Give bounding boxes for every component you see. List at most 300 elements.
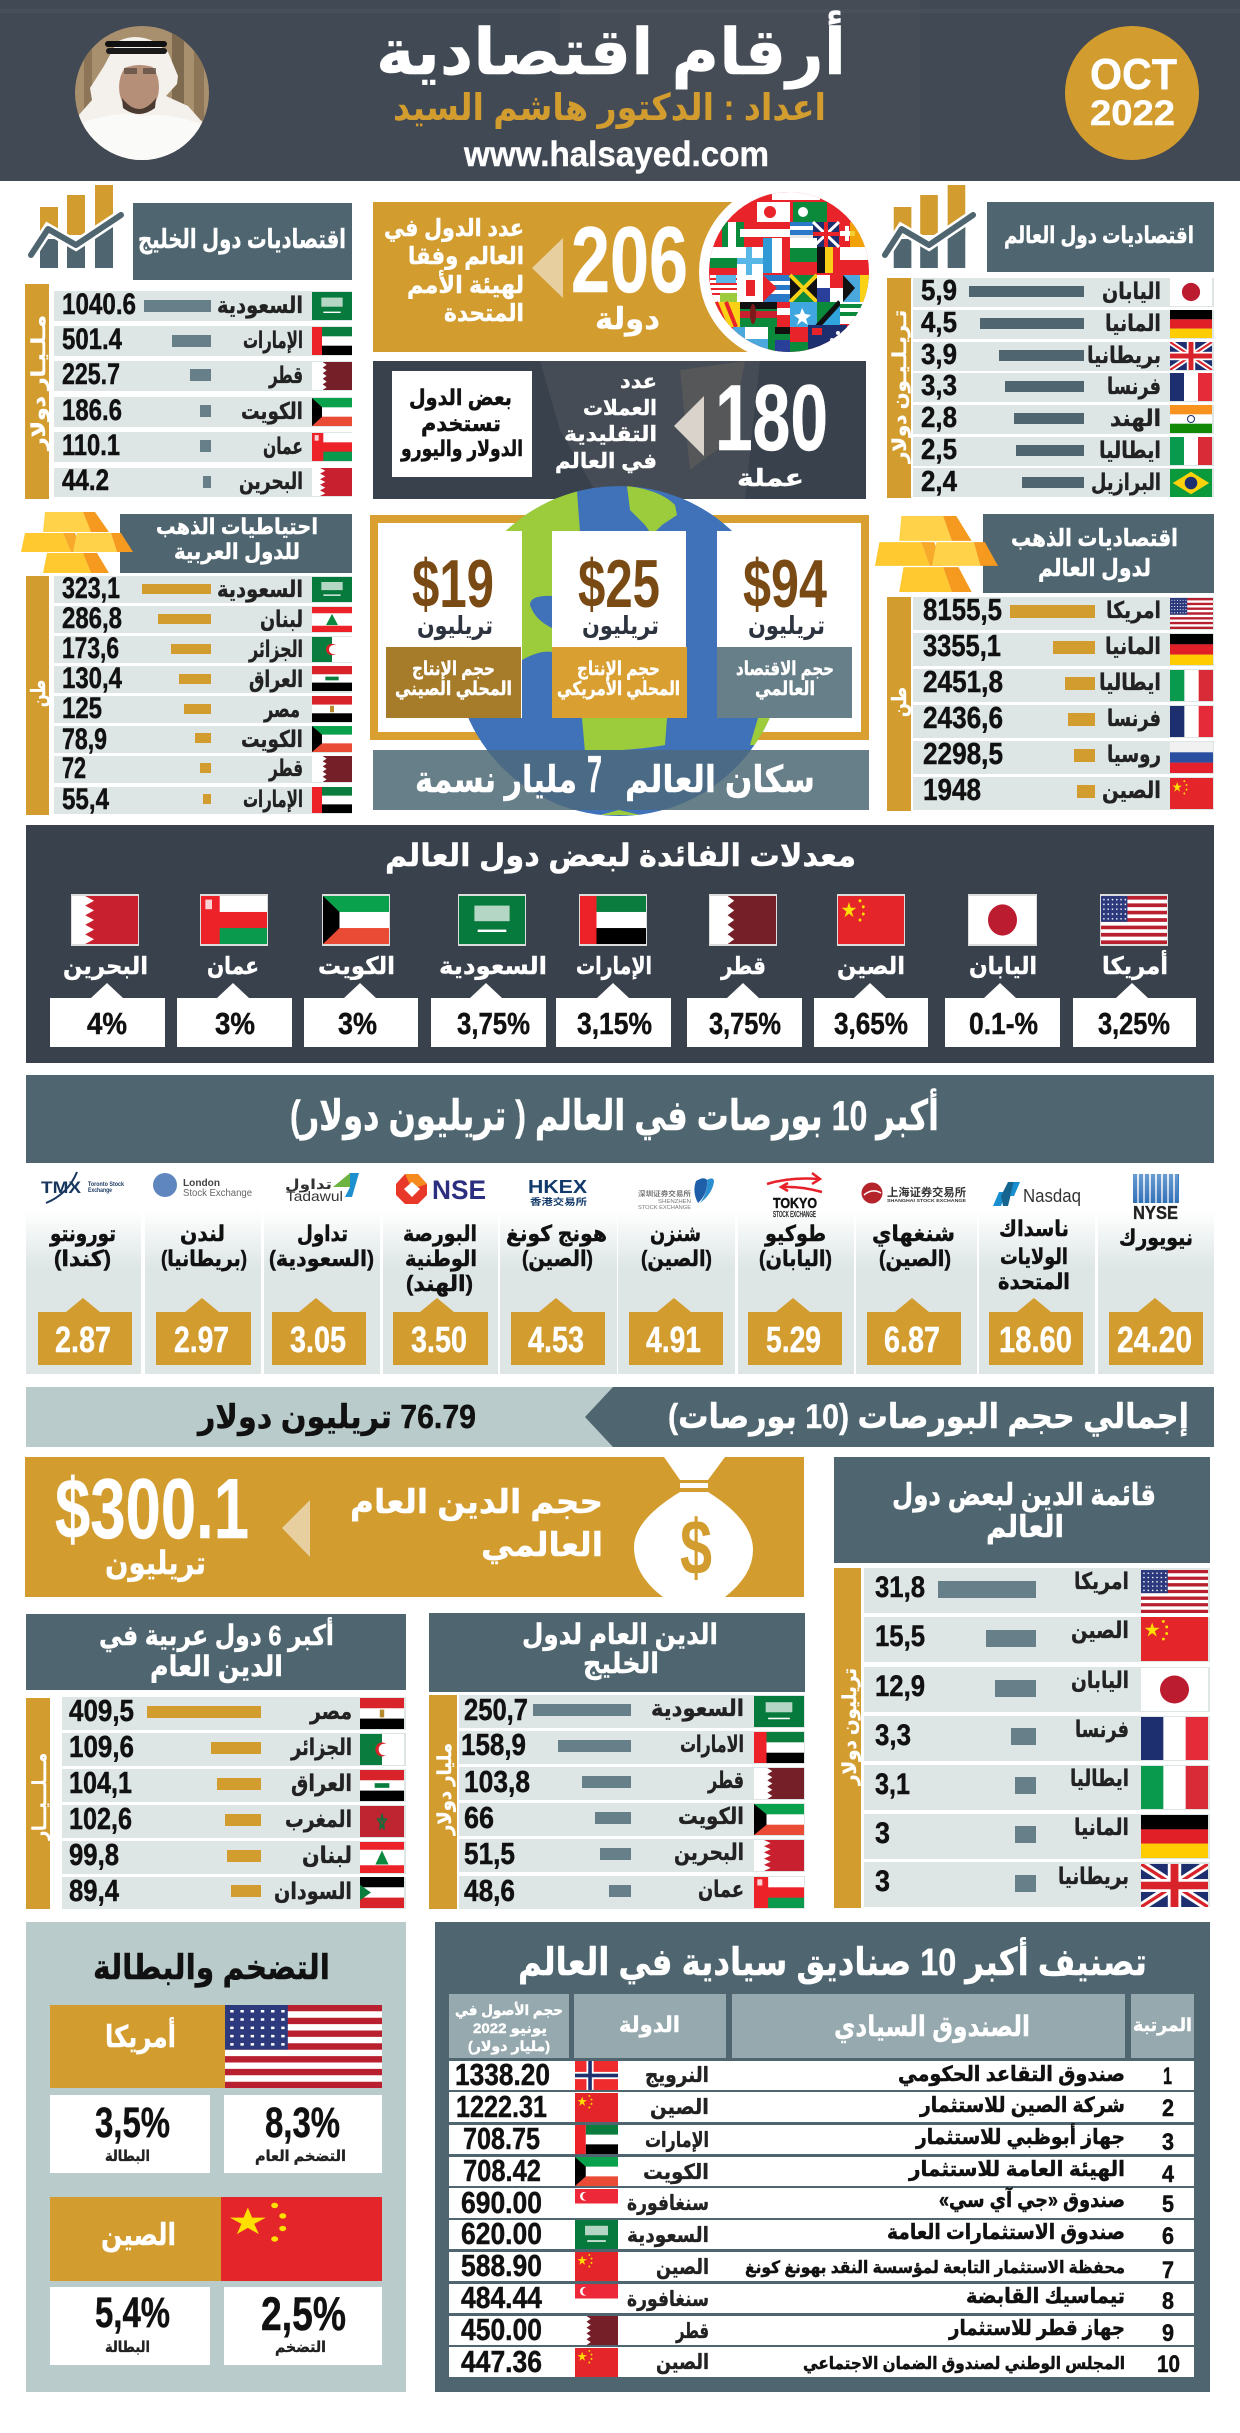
- table row 2: 2: [1162, 2095, 1174, 2122]
- table header: المرتبة: [1133, 2015, 1192, 2036]
- heading: [834, 1457, 1210, 1563]
- logo: HKEX: 香港交易所: [530, 1196, 587, 1207]
- heading: التضخم والبطالة: [93, 1949, 330, 1988]
- table row 1: صندوق التقاعد الحكومي: [898, 2063, 1125, 2086]
- table row 2: شركة الصين للاستثمار: [919, 2094, 1125, 2117]
- row: Saudi: [54, 288, 352, 321]
- table row 5: 5: [1162, 2191, 1174, 2218]
- band: world population: 7: [587, 746, 602, 804]
- row: Oman: 48,6: [464, 1873, 515, 1908]
- row: China: الصين: [1102, 777, 1161, 804]
- table row 2: الصين: [650, 2096, 709, 2119]
- column: Toronto: [26, 1165, 141, 1374]
- column: Shenzhen: [618, 1165, 735, 1374]
- logo: Shenzhen: [638, 1178, 714, 1211]
- table header: الصندوق السيادي: [834, 2011, 1030, 2043]
- item: Oman: 3%: [215, 1006, 255, 1041]
- unit bar: [25, 284, 50, 499]
- column: London: [145, 1165, 261, 1374]
- row: Germany: المانيا: [1074, 1814, 1129, 1840]
- row: Japan: 5,9: [921, 275, 957, 307]
- panel: Arab public debt: [26, 1614, 406, 1909]
- table row 7: الصين: [656, 2256, 709, 2279]
- row: India: الهند: [1110, 405, 1161, 432]
- table row 6: 6: [1162, 2223, 1174, 2250]
- item: Qatar: 3,75%: [709, 1006, 781, 1041]
- card: US GDP: [552, 546, 687, 718]
- panel: total exchanges: [26, 1387, 1214, 1447]
- logo: Nasdaq: [993, 1182, 1081, 1206]
- card: world economy: حجم الاقتصاد: [736, 659, 834, 680]
- description: العالمي: [481, 1526, 603, 1564]
- card: world economy: [717, 546, 852, 718]
- item: USA: 3,25%: [1098, 1006, 1170, 1041]
- row: Russia: 2298,5: [923, 736, 1003, 771]
- row: USA: [913, 592, 1214, 630]
- row: Oman: عمان: [698, 1876, 744, 1902]
- table header: (مليار دولار): [468, 2038, 550, 2055]
- column: NSE: 3.50: [411, 1319, 467, 1360]
- arrow: [532, 238, 563, 298]
- row: Russia: [913, 736, 1214, 774]
- description: حجم الدين العام: [350, 1483, 603, 1522]
- stat: US inflation: التضخم العام: [255, 2148, 346, 2165]
- item: Bahrain: البحرين: [63, 953, 148, 980]
- subtitle: author: اعداد : الدكتور هاشم السيد: [393, 87, 826, 129]
- row: Lebanon: [62, 1837, 406, 1874]
- description: [350, 1483, 603, 1564]
- panel: world countries count: [373, 192, 869, 352]
- row: Kuwait: [54, 723, 352, 756]
- heading: الخليج: [583, 1648, 659, 1680]
- panel: world economies: [885, 185, 1214, 498]
- row: Kuwait: [54, 394, 352, 427]
- row: Lebanon: [54, 602, 352, 635]
- table row 8: 8: [1162, 2288, 1174, 2315]
- table row 4: 4: [1162, 2161, 1175, 2188]
- description: عدد الدول في: [384, 215, 524, 242]
- column: London: لندن: [180, 1221, 225, 1246]
- column: Shanghai: 6.87: [884, 1319, 940, 1360]
- logo: Nasdaq: Nasdaq: [1023, 1186, 1081, 1206]
- row: France: [864, 1716, 1210, 1761]
- row: China: [913, 772, 1214, 810]
- table row 5: صندوق «جي آي سي»: [939, 2187, 1125, 2213]
- column: NSE: البورصة: [403, 1221, 477, 1247]
- logo: Shanghai: SHANGHAI STOCK EXCHANGE: [887, 1198, 966, 1203]
- unit bar: [26, 1698, 51, 1909]
- heading: قائمة الدين لبعض دول: [892, 1479, 1156, 1513]
- logo: Tokyo: [767, 1173, 822, 1219]
- row: UAE: 158,9: [461, 1727, 526, 1762]
- row: USA: [864, 1568, 1210, 1613]
- table row 8: تيماسيك القابضة: [966, 2285, 1125, 2308]
- row: Russia: روسيا: [1107, 741, 1161, 768]
- table row 10: 10: [1157, 2351, 1180, 2378]
- row: India: 2,8: [921, 402, 957, 434]
- row: Egypt: 409,5: [69, 1693, 134, 1728]
- row: Qatar: 103,8: [464, 1764, 530, 1799]
- card: US GDP: $25: [578, 546, 660, 622]
- description: العملات: [583, 397, 657, 420]
- row: Germany: 3355,1: [923, 628, 1001, 663]
- row: USA: امريكا: [1074, 1568, 1129, 1595]
- item: Kuwait: 3%: [338, 1006, 377, 1041]
- row: UAE: [54, 323, 352, 356]
- column: Nasdaq: [979, 1165, 1095, 1374]
- row: UAE: 55,4: [62, 783, 109, 816]
- row: Iraq: العراق: [291, 1770, 352, 1797]
- stat: China unemployment: [50, 2287, 210, 2365]
- row: Egypt: [62, 1693, 406, 1730]
- stat: US inflation: [224, 2095, 382, 2173]
- column: NSE: (الهند): [406, 1271, 473, 1297]
- column: Nasdaq: المتحدة: [998, 1269, 1070, 1294]
- table row 8: 484.44: [461, 2280, 543, 2315]
- panel: sovereign wealth funds: [435, 1922, 1210, 2392]
- panel: Gulf economies: [25, 185, 352, 499]
- row: Bahrain: 51,5: [464, 1836, 515, 1871]
- logo: Tadawul: تداول: [285, 1176, 332, 1193]
- item: Japan: اليابان: [969, 953, 1037, 980]
- row: France: فرنسا: [1107, 373, 1161, 400]
- table header: [449, 1994, 1194, 2058]
- item: Japan: [945, 894, 1060, 1047]
- row: Kuwait: [459, 1800, 805, 1836]
- logo: Tadawul: Tadawul: [286, 1188, 343, 1204]
- unit bar: [887, 597, 911, 811]
- row: Saudi: 250,7: [464, 1692, 528, 1727]
- heading: [429, 1613, 805, 1692]
- row: UAE: 501.4: [62, 323, 122, 356]
- row: Egypt: مصر: [263, 696, 300, 723]
- column: Tokyo: طوكيو: [764, 1221, 826, 1247]
- row: Saudi: 1040.6: [62, 288, 136, 321]
- arrow: [282, 1500, 310, 1557]
- row: Brazil: [913, 466, 1214, 498]
- row: Kuwait: 186.6: [62, 394, 122, 427]
- row: Qatar: 225.7: [62, 358, 120, 391]
- card: China GDP: [386, 546, 521, 718]
- unit bar: طن: [889, 687, 911, 717]
- heading: لدول العالم: [1038, 555, 1151, 582]
- row: Bahrain: البحرين: [674, 1839, 744, 1866]
- panel: Gulf public debt: [429, 1613, 805, 1909]
- table row 10: 447.36: [461, 2344, 542, 2379]
- panel: gold economies of the world: [875, 514, 1214, 811]
- header banner: [0, 0, 1240, 181]
- country band: USA: أمريكا: [105, 2017, 176, 2054]
- table row 2: [449, 2089, 1194, 2124]
- table row 4: الهيئة العامة للاستثمار: [908, 2158, 1125, 2181]
- row: Algeria: الجزائر: [248, 636, 303, 663]
- logo: HKEX: HKEX: [528, 1177, 587, 1197]
- row: Germany: 3: [875, 1817, 890, 1850]
- table row 7: [449, 2248, 1194, 2284]
- unit bar: تريليون دولار: [840, 1668, 861, 1786]
- heading: اقتصاديات الذهب: [1011, 525, 1178, 552]
- row: China: الصين: [1071, 1617, 1129, 1644]
- row: Italy: 2,5: [921, 434, 957, 466]
- row: Iraq: 130,4: [62, 662, 122, 695]
- item: UAE: الإمارات: [576, 953, 652, 980]
- column: NSE: [383, 1165, 498, 1374]
- heading: [26, 1614, 406, 1690]
- row: Italy: [864, 1765, 1210, 1810]
- table row 1: النرويج: [645, 2064, 709, 2087]
- card: US GDP: المحلي الأمريكي: [557, 677, 680, 700]
- row: Japan: 12,9: [875, 1670, 925, 1703]
- unit bar: مليار دولار: [435, 1743, 456, 1836]
- heading: أكبر 6 دول عربية في: [99, 1617, 334, 1652]
- row: Kuwait: 66: [464, 1800, 494, 1835]
- table row 9: جهاز قطر للاستثمار: [948, 2317, 1125, 2340]
- item: Saudi: السعودية: [439, 953, 547, 980]
- column: Shenzhen: (الصين): [641, 1246, 712, 1272]
- row: Algeria: الجزائر: [290, 1734, 352, 1761]
- heading: احتياطيات الذهب: [156, 514, 318, 539]
- unit bar: [887, 278, 911, 498]
- row: Algeria: 109,6: [69, 1729, 134, 1764]
- row: Sudan: السودان: [274, 1878, 352, 1905]
- callout box: الدولار واليورو: [400, 436, 523, 462]
- table row 7: محفظة الاستثمار التابعة لمؤسسة النقد بهونغ كونغ: [745, 2258, 1125, 2278]
- icon: money bag: $: [680, 1503, 712, 1591]
- table row 5: سنغافورة: [627, 2192, 709, 2215]
- column: Shanghai: (الصين): [879, 1246, 951, 1272]
- row: Oman: عمان: [263, 433, 303, 459]
- column: NYSE: نيويورك: [1119, 1225, 1193, 1251]
- heading: الدين العام: [150, 1651, 283, 1683]
- column: Nasdaq: ناسداك: [999, 1216, 1069, 1241]
- unit bar: مـلـيـار دولار: [29, 315, 50, 451]
- country band: China: الصين: [101, 2219, 176, 2252]
- row: Britain: 3: [875, 1865, 890, 1898]
- stat: US unemployment: البطالة: [105, 2148, 150, 2165]
- heading: [983, 514, 1214, 593]
- band: world population: مليار نسمة: [415, 759, 577, 801]
- unit bar: [834, 1568, 861, 1908]
- table row 3: [449, 2121, 1194, 2156]
- row: Germany: [913, 307, 1214, 339]
- logo: TMX: TMX: [41, 1178, 82, 1197]
- row: Britain: [913, 339, 1214, 371]
- row: UAE: [54, 783, 352, 816]
- column: London: (بريطانيا): [161, 1246, 247, 1272]
- table row 10: [449, 2344, 1194, 2379]
- description: في العالم: [555, 450, 657, 473]
- row: Algeria: [54, 632, 352, 665]
- icon: gold bars: [875, 516, 998, 592]
- column: Hong Kong: [500, 1165, 617, 1374]
- row: Brazil: البرازيل: [1091, 469, 1161, 496]
- callout box: تستخدم: [421, 411, 501, 436]
- row: Italy: 3,1: [875, 1768, 910, 1801]
- icon: growth chart: [885, 185, 973, 268]
- unit bar: طن: [28, 680, 50, 707]
- description: التقليدية: [564, 423, 657, 446]
- heading: Gulf economies: [133, 203, 352, 280]
- logo: NYSE: [1133, 1174, 1178, 1223]
- logo: HKEX: [528, 1177, 587, 1207]
- logo: LSE: Stock Exchange: [183, 1188, 252, 1199]
- logo: Shenzhen: 深圳证券交易所: [638, 1189, 691, 1198]
- column: Hong Kong: هونج كونغ: [506, 1221, 607, 1247]
- logo: Tokyo: STOCK EXCHANGE: [773, 1210, 816, 1219]
- row: Bahrain: [54, 464, 352, 497]
- table row 2: 1222.31: [456, 2089, 547, 2124]
- row: Japan: اليابان: [1102, 278, 1161, 304]
- item: USA: أمريكا: [1102, 950, 1168, 980]
- callout box: [392, 371, 532, 477]
- row: UAE: [459, 1727, 805, 1764]
- row: China: [864, 1617, 1210, 1662]
- row: Italy: [913, 434, 1214, 466]
- row: USA: 8155,5: [923, 592, 1002, 627]
- row: Germany: [913, 628, 1214, 666]
- stat: China inflation: التضخم: [275, 2339, 326, 2356]
- table row 1: 1338.20: [455, 2057, 550, 2092]
- logo: LSE: [153, 1173, 252, 1199]
- row: France: 3,3: [875, 1719, 911, 1752]
- row: France: [913, 700, 1214, 738]
- column: Tokyo: (اليابان): [759, 1246, 832, 1271]
- row: Saudi: 323,1: [62, 572, 120, 605]
- description: العالم وفقا: [408, 243, 524, 270]
- logo: TMX: Exchange: [88, 1187, 112, 1194]
- item: Kuwait: الكويت: [318, 953, 395, 980]
- callout box: بعض الدول: [409, 385, 512, 411]
- item: Oman: عمان: [207, 953, 259, 980]
- unit bar: تـريـلـيـون دولار: [890, 310, 911, 464]
- heading: Gulf economies: اقتصاديات دول الخليج: [138, 224, 346, 255]
- column: Shenzhen: شنزن: [650, 1221, 701, 1247]
- stat: US unemployment: [50, 2095, 210, 2173]
- icon: money bag: [634, 1457, 753, 1597]
- label: trillion: تريليون: [105, 1545, 206, 1582]
- logo: Tokyo: TOKYO: [773, 1195, 817, 1212]
- row: Morocco: 102,6: [69, 1801, 132, 1836]
- table row 10: الصين: [656, 2351, 709, 2374]
- heading: تصنيف أكبر 10 صناديق سيادية في العالم: [518, 1937, 1147, 1985]
- row: Germany: [864, 1814, 1210, 1859]
- item: UAE: [556, 894, 671, 1047]
- item: China: 3,65%: [834, 1006, 908, 1041]
- description: [555, 371, 657, 473]
- table row 7: 588.90: [461, 2248, 542, 2283]
- table row 5: 690.00: [461, 2185, 542, 2220]
- heading: [120, 514, 352, 573]
- card: US GDP: حجم الإنتاج: [577, 659, 660, 680]
- row: Oman: [54, 429, 352, 462]
- row: Germany: المانيا: [1105, 310, 1161, 336]
- date badge: 2022: [1090, 94, 1175, 133]
- title: أرقام اقتصادية: [376, 10, 846, 90]
- table row 6: 620.00: [461, 2216, 542, 2251]
- table row 6: السعودية: [627, 2224, 709, 2247]
- table row 9: 9: [1162, 2320, 1174, 2347]
- row: UAE: الإمارات: [243, 786, 303, 813]
- stat: US inflation: 8,3%: [265, 2099, 340, 2147]
- column: Shenzhen: 4.91: [646, 1319, 701, 1360]
- card: China GDP: $19: [412, 546, 494, 622]
- unit bar: [429, 1695, 457, 1909]
- row: Italy: ايطاليا: [1099, 437, 1161, 463]
- panel: total exchanges: إجمالي حجم البورصات (10 بورصات): [668, 1398, 1189, 1437]
- row: Lebanon: 286,8: [62, 602, 122, 635]
- column: Tadawul: (السعودية): [269, 1246, 374, 1272]
- logo: NSE: NSE: [432, 1175, 486, 1205]
- row: China: 1948: [923, 772, 981, 807]
- table header: الدولة: [619, 2012, 680, 2038]
- band: world population: سكان العالم: [625, 759, 815, 801]
- card: world economy: تريليون: [748, 612, 825, 641]
- row: Iraq: 104,1: [69, 1765, 132, 1800]
- panel: stock exchanges heading: [26, 1075, 1214, 1163]
- table row 5: [449, 2185, 1194, 2220]
- table header: يونيو 2022: [473, 2020, 547, 2037]
- logo: Tadawul: [285, 1173, 359, 1204]
- row: Algeria: 173,6: [62, 632, 119, 665]
- card: world economy: العالمي: [755, 679, 815, 700]
- item: Saudi: 3,75%: [457, 1006, 530, 1041]
- item: Japan: 0.1-%: [969, 1006, 1038, 1041]
- panel: world economy with earth globe: [370, 486, 869, 816]
- column: Tokyo: 5.29: [766, 1319, 821, 1360]
- row: UAE: الإمارات: [243, 327, 303, 354]
- column: Tadawul: تداول: [297, 1221, 348, 1247]
- label: currency: عملة: [737, 465, 804, 492]
- country band: USA: [50, 2005, 382, 2088]
- row: Kuwait: 78,9: [62, 723, 107, 756]
- row: Sudan: 89,4: [69, 1873, 120, 1908]
- portrait photo: [75, 26, 209, 160]
- row: Kuwait: الكويت: [678, 1803, 744, 1830]
- table row 3: 3: [1162, 2129, 1174, 2156]
- row: France: 3,3: [921, 370, 957, 402]
- logo: Shanghai: 上海证券交易所: [887, 1185, 966, 1199]
- illustration: earth globe: [468, 486, 770, 816]
- row: Sudan: [62, 1873, 406, 1909]
- heading: العالم: [986, 1511, 1064, 1545]
- row: Saudi: [459, 1692, 805, 1728]
- row: UAE: الامارات: [680, 1731, 744, 1758]
- date badge: [1065, 26, 1199, 160]
- logo: NSE: [396, 1174, 486, 1205]
- table row 1: [449, 2057, 1194, 2092]
- row: USA: 31,8: [875, 1571, 925, 1604]
- row: China: 15,5: [875, 1620, 925, 1653]
- unit bar: [26, 576, 50, 815]
- row: Bahrain: [459, 1836, 805, 1872]
- heading: world economies: اقتصاديات دول العالم: [1004, 222, 1194, 249]
- row: Lebanon: لبنان: [260, 606, 303, 632]
- table row 1: 1: [1163, 2063, 1172, 2090]
- column: NYSE: 24.20: [1117, 1319, 1192, 1360]
- column: NSE: الوطنية: [405, 1246, 477, 1272]
- table row 9: 450.00: [461, 2312, 542, 2347]
- row: Iraq: [62, 1765, 406, 1802]
- row: India: [913, 402, 1214, 434]
- row: Morocco: [62, 1801, 406, 1838]
- column: Tadawul: 3.05: [290, 1319, 346, 1360]
- row: Qatar: قطر: [707, 1767, 744, 1794]
- row: Britain: بريطانيا: [1087, 342, 1161, 369]
- card: China GDP: حجم الإنتاج: [412, 659, 495, 680]
- date badge: OCT: [1090, 50, 1177, 99]
- column: Shanghai: [856, 1165, 977, 1374]
- stat: China inflation: 2,5%: [261, 2287, 346, 2340]
